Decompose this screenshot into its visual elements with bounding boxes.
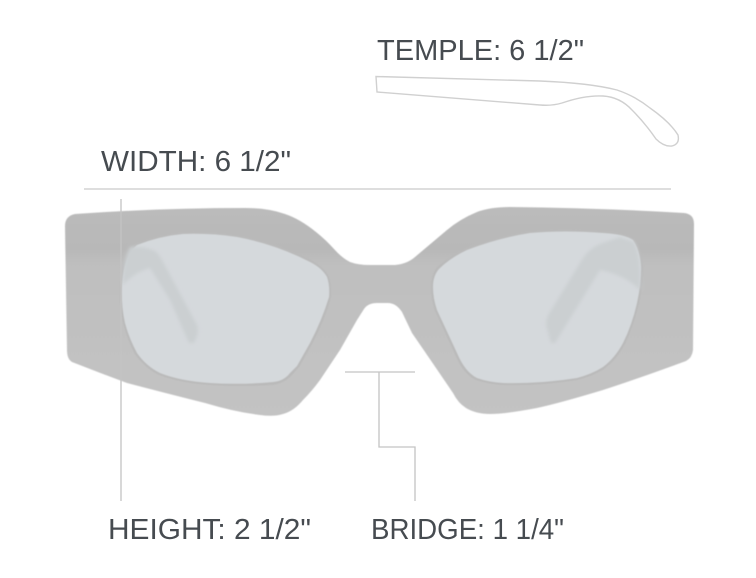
height measurement line xyxy=(120,199,122,501)
right temple seen through lens xyxy=(546,237,640,343)
label: height: HEIGHT: 2 1/2" xyxy=(108,514,311,546)
left lens xyxy=(122,234,329,384)
left temple seen through lens xyxy=(123,247,198,343)
width measurement line xyxy=(84,188,671,190)
sunglasses illustration xyxy=(65,207,694,416)
label: bridge: BRIDGE: 1 1/4" xyxy=(371,514,564,546)
right lens rim xyxy=(431,230,643,385)
frame xyxy=(65,207,694,416)
label: temple: TEMPLE: 6 1/2" xyxy=(377,35,584,67)
right lens xyxy=(433,232,641,383)
left lens rim xyxy=(120,232,331,386)
label: width: WIDTH: 6 1/2" xyxy=(101,146,291,178)
bridge measurement line xyxy=(345,372,415,501)
temple arm outline xyxy=(376,76,678,146)
